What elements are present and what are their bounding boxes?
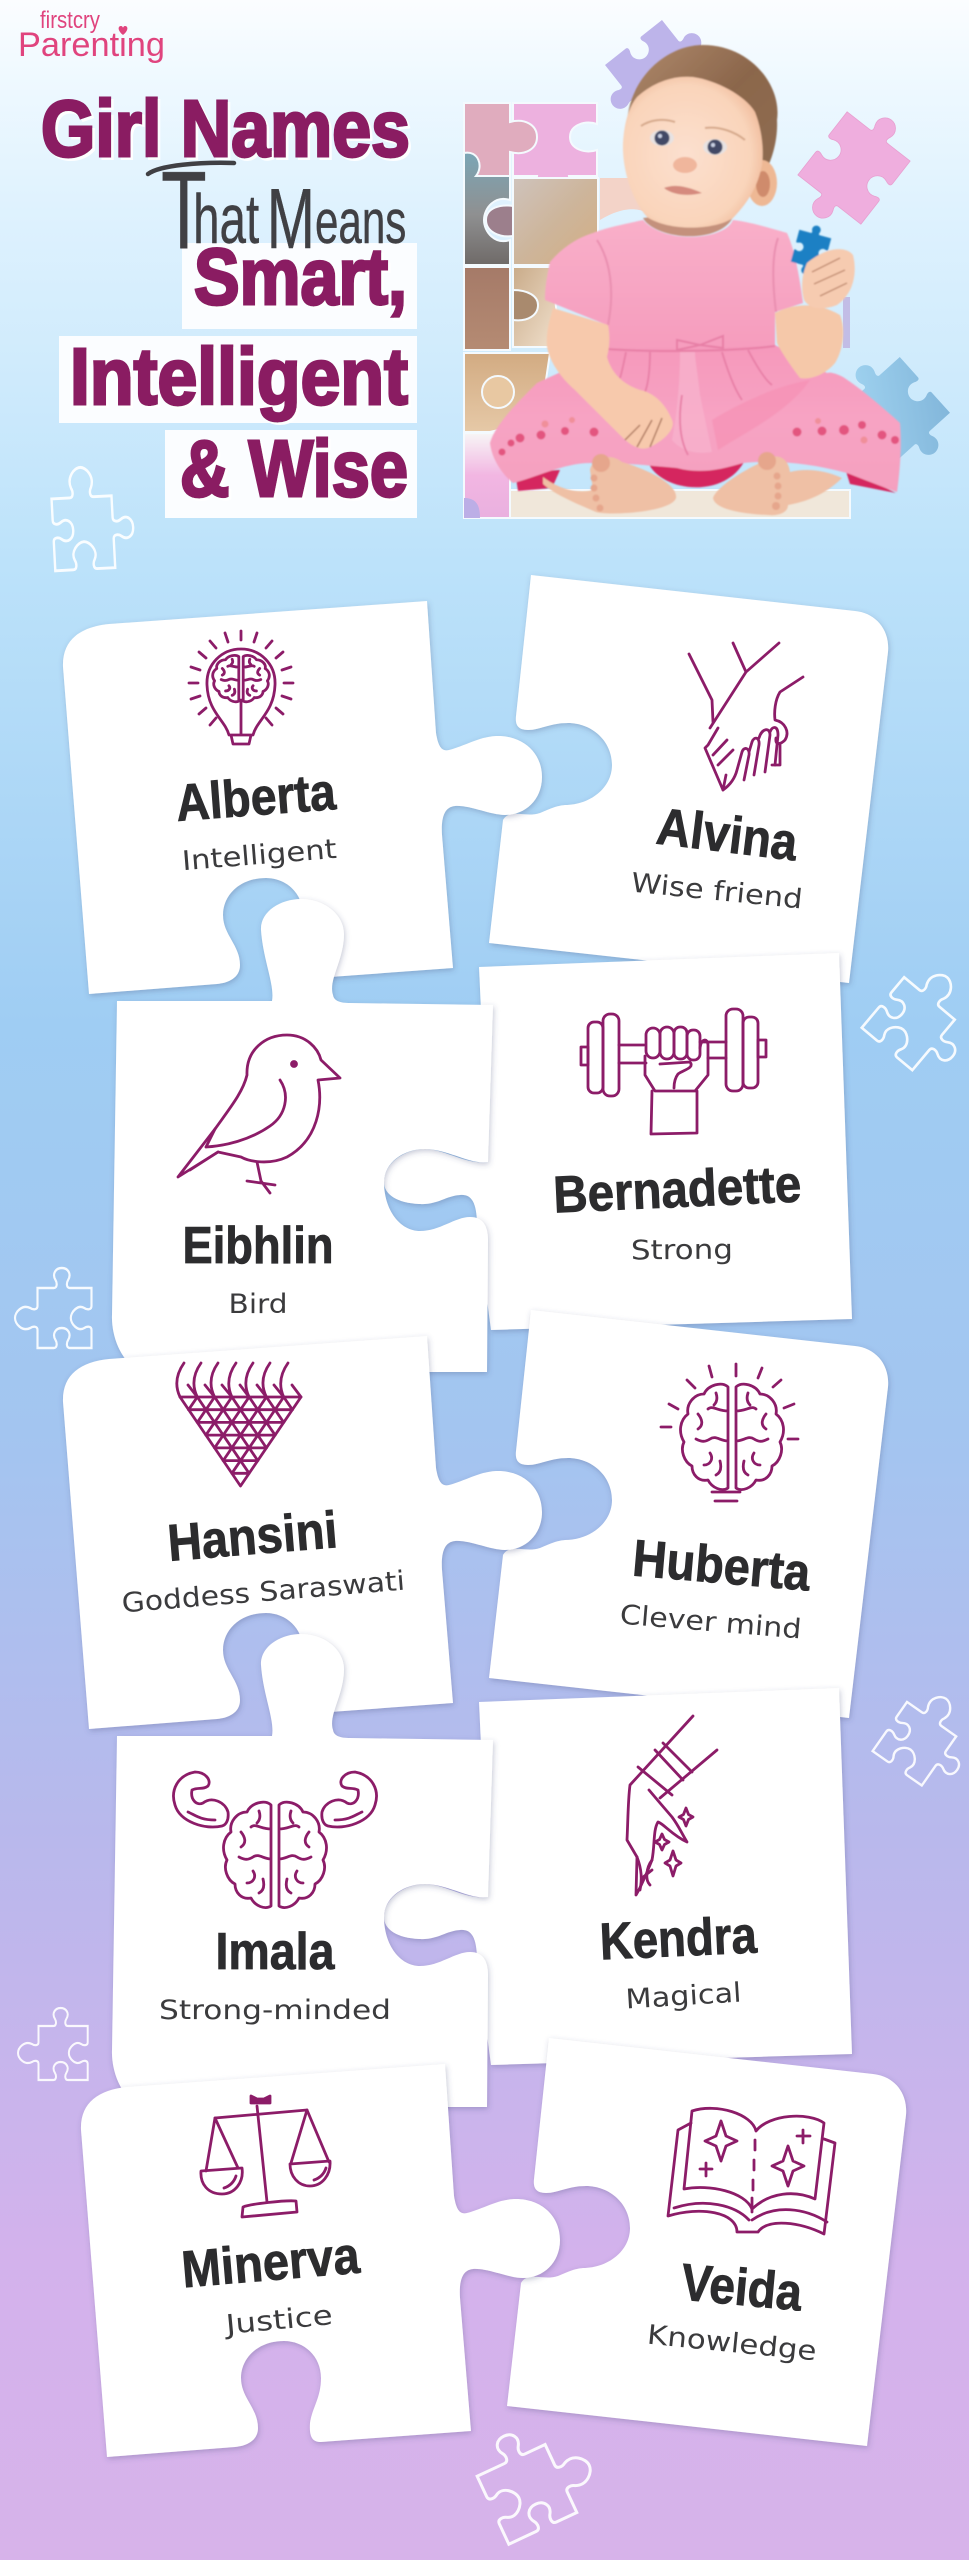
nose and mouth (673, 157, 697, 173)
icon: bird (178, 1035, 340, 1193)
skirt (490, 345, 901, 492)
meaning: Goddess Saraswati (121, 1566, 406, 1619)
panel: Hansini (63, 1336, 542, 1729)
panel: Eibhlin (112, 899, 493, 1372)
name: Alberta (174, 763, 339, 833)
meaning: Strong (631, 1235, 733, 1266)
icon: muscular brain (174, 1772, 376, 1908)
title line: That Means: hat (193, 180, 260, 258)
title line: That Means: M (267, 172, 315, 267)
panel: Kendra (384, 1688, 852, 2065)
title box: Intelligent: Intelligent (70, 332, 408, 421)
meaning: Magical (625, 1978, 742, 2016)
icon: magic hand (627, 1716, 717, 1895)
icon: brain with rays (661, 1364, 798, 1501)
panel: Imala (112, 1634, 493, 2107)
meaning: Intelligent (181, 834, 338, 877)
embroidery bands (498, 417, 899, 456)
puzzle piece: pink (785, 95, 923, 241)
logo: FirstCry Parenting: Parenting (18, 26, 165, 64)
meaning: Clever mind (619, 1600, 803, 1645)
puzzle piece: light blue (831, 343, 963, 477)
name: Eibhlin (182, 1217, 334, 1275)
eyes (650, 130, 674, 146)
magenta skirt lining (515, 460, 896, 493)
puzzle piece: lavender (590, 8, 722, 134)
meaning: Justice (222, 2300, 334, 2341)
left leg and foot (543, 457, 676, 513)
icon: triangle lattice yantra (177, 1363, 301, 1486)
brows (641, 120, 745, 140)
name: Minerva (179, 2227, 363, 2299)
panel: Minerva (81, 2064, 560, 2457)
decorative outline puzzle pieces (15, 465, 969, 2544)
name: Bernadette (552, 1155, 802, 1225)
waist seam and bow (607, 336, 775, 351)
toes (590, 452, 782, 512)
icon: holding hands (689, 643, 803, 790)
hand (802, 249, 855, 308)
panel: Alvina (489, 575, 888, 983)
right arm (775, 305, 843, 378)
panel: Huberta (489, 1310, 888, 1718)
meaning: Strong-minded (159, 1995, 391, 2026)
icon: dumbbell in fist (581, 1009, 766, 1134)
name: Veida (679, 2254, 805, 2323)
meaning: Wise friend (630, 868, 804, 916)
meaning: Knowledge (646, 2320, 818, 2367)
name: Alvina (654, 798, 802, 873)
title box: and Wise: & Wise (180, 424, 408, 513)
meaning: Bird (228, 1289, 288, 1320)
title box: Smart: Smart, (194, 232, 407, 321)
title line: That Means: eans (315, 188, 406, 257)
icon: scales of justice (201, 2096, 330, 2217)
baby figure (490, 45, 901, 515)
small blue puzzle piece (789, 222, 833, 278)
icon: open book with sparkles (668, 2108, 835, 2234)
logo: FirstCry Parenting (18, 7, 165, 64)
panel: Bernadette (384, 953, 852, 1330)
name: Hansini (166, 1501, 340, 1573)
bodice (545, 220, 803, 350)
photo: baby with jigsaw backdrop (464, 8, 963, 518)
jigsaw mosaic backdrop (464, 103, 850, 518)
logo: FirstCry Parenting: firstcry (40, 7, 100, 34)
name: Huberta (630, 1530, 814, 1603)
panel: Veida (507, 2038, 906, 2446)
name: Imala (216, 1923, 335, 1981)
title line: That Means: T (161, 149, 207, 271)
left arm (547, 308, 673, 449)
neck shadow (643, 212, 733, 236)
panel: Alberta (63, 601, 542, 994)
right leg and foot (713, 457, 842, 515)
head and hair (627, 45, 778, 190)
title (41, 84, 417, 518)
icon: brain lightbulb (189, 631, 293, 744)
title line: That Means (148, 149, 406, 271)
name: Kendra (598, 1906, 759, 1972)
title line: Girl Names: Girl Names (41, 84, 410, 173)
